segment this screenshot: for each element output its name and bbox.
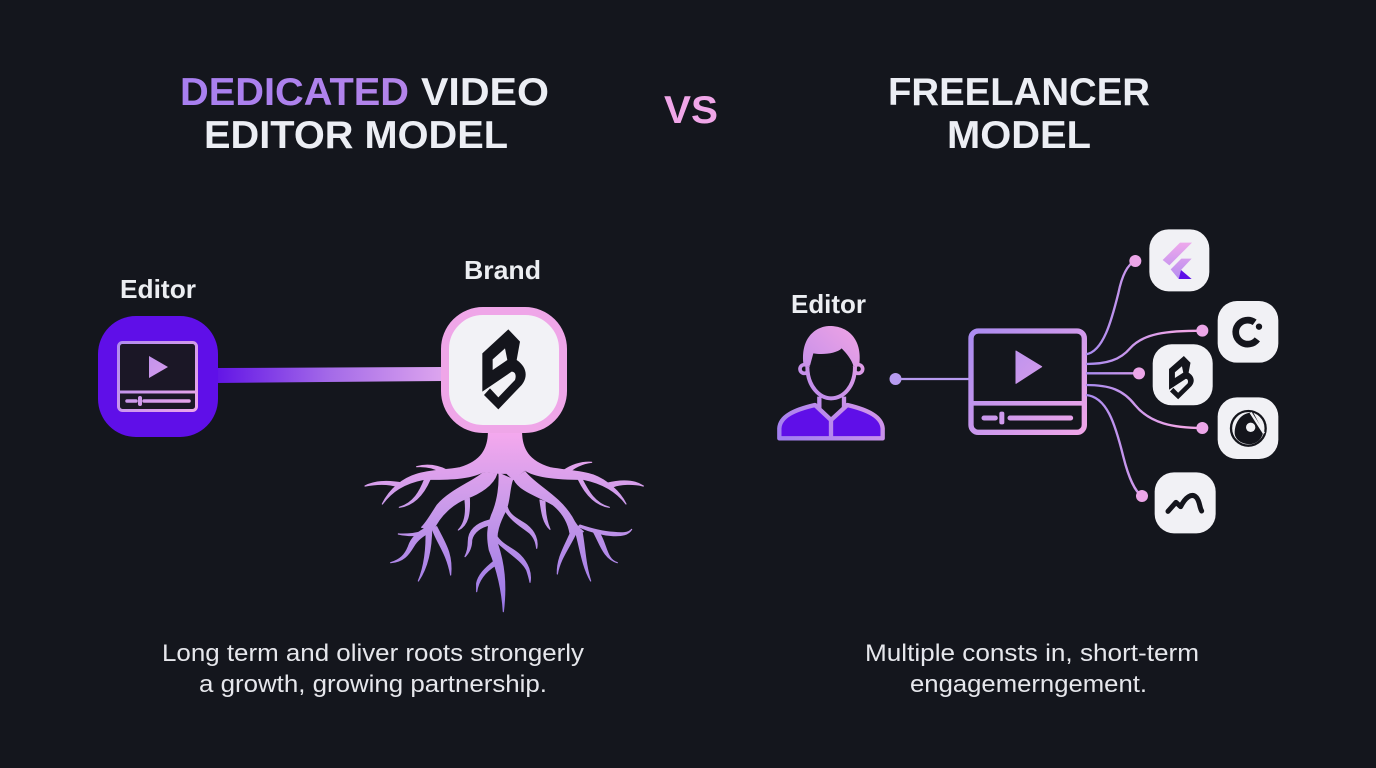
caption: freelancer model: Multiple consts in, short-term bbox=[865, 640, 1199, 667]
panel: dedicated model diagram bbox=[98, 255, 643, 612]
title: dedicated video editor model bbox=[180, 71, 549, 157]
title: freelancer model: MODEL bbox=[947, 114, 1091, 157]
icon: client tile B bbox=[1153, 344, 1213, 405]
caption: freelancer model: engagemerngement. bbox=[910, 671, 1147, 698]
icon: video frame bbox=[971, 331, 1084, 432]
icon: editor video tile bbox=[98, 316, 218, 437]
label: brand: Brand bbox=[464, 255, 541, 285]
caption: dedicated model bbox=[162, 640, 584, 698]
icon: client tile C bbox=[1218, 301, 1278, 363]
connector wires to clients bbox=[1086, 255, 1208, 502]
title: freelancer model: FREELANCER bbox=[888, 71, 1150, 114]
connector bar bbox=[216, 367, 443, 383]
caption: dedicated model: a growth, growing partnership. bbox=[199, 671, 547, 698]
title: dedicated video editor model: DEDICATED bbox=[180, 71, 409, 114]
title: freelancer model bbox=[888, 71, 1150, 157]
title: dedicated video editor model: VIDEO bbox=[421, 71, 549, 114]
vs label: VS bbox=[664, 89, 718, 132]
label: editor: Editor bbox=[120, 274, 196, 304]
title: dedicated video editor model: EDITOR MODEL bbox=[204, 114, 508, 157]
icon: client tile wave bbox=[1155, 472, 1216, 533]
icon: editor person bbox=[779, 326, 883, 438]
label: editor: Editor bbox=[791, 289, 866, 319]
icon: client tile flutter bbox=[1149, 229, 1209, 291]
caption: dedicated model: Long term and oliver roots strongerly bbox=[162, 640, 584, 667]
icon: client tile circle bbox=[1218, 397, 1278, 459]
panel: freelancer model diagram bbox=[779, 229, 1278, 533]
connector with dot bbox=[890, 373, 970, 385]
caption: freelancer model bbox=[865, 640, 1199, 698]
icon: brand tile bbox=[445, 311, 563, 429]
icon: brand roots bbox=[365, 427, 643, 612]
